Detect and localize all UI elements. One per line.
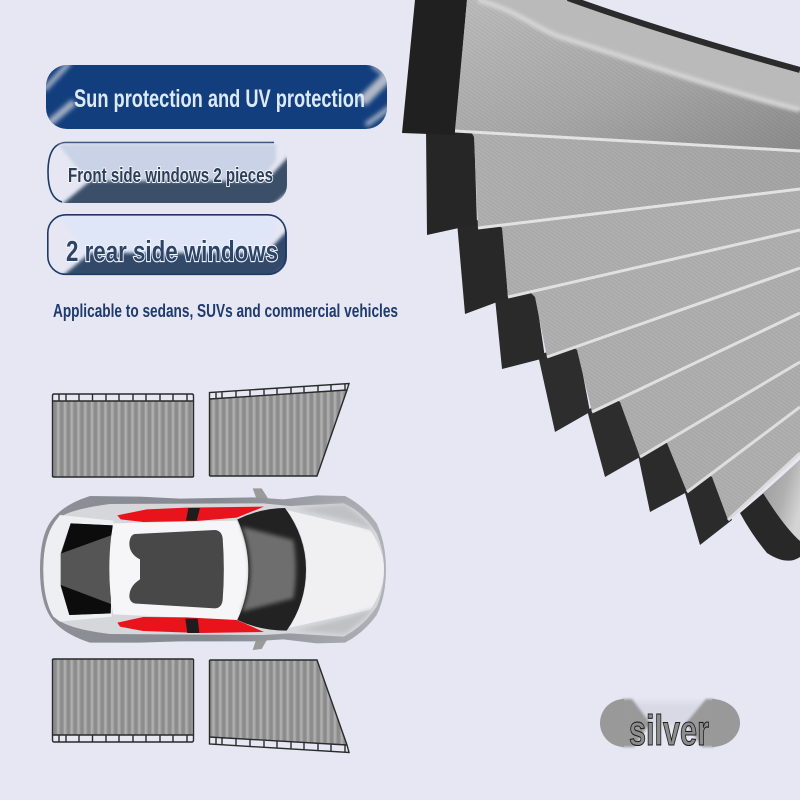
red rear side window top [117, 507, 264, 522]
badge label: Sun protection and UV protection [74, 85, 365, 113]
badge label: 2 rear side windows [66, 236, 278, 268]
badge: front side windows [48, 142, 290, 206]
pleat 8 [683, 395, 800, 545]
tag label: silver [629, 707, 709, 755]
badge: sun protection [44, 62, 392, 129]
roof [109, 521, 248, 620]
badge two-tone fill [62, 228, 287, 275]
shade diagram: front top [52, 394, 194, 477]
pleat 3 [457, 180, 800, 314]
shade diagram: rear bottom [210, 660, 349, 752]
colour tag: silver [600, 699, 740, 755]
panoramic sunroof [129, 530, 224, 608]
rear window lower shade [61, 585, 111, 615]
mirrors [253, 488, 272, 650]
windshield interior [242, 527, 296, 612]
tag right lobe [712, 699, 740, 747]
red front side window bottom [117, 617, 264, 633]
hood [287, 510, 384, 628]
clip band and edges [210, 384, 349, 476]
tag right lobe fade [686, 699, 714, 747]
rear window upper shade [61, 523, 113, 553]
rear deck [43, 515, 113, 622]
badge body [46, 65, 387, 129]
windshield [237, 508, 306, 631]
pleats [52, 401, 194, 477]
pleats [210, 390, 347, 476]
pleat 6 [587, 300, 800, 477]
pleats [52, 659, 194, 735]
tag centre shade [625, 702, 710, 726]
body upper surface [43, 503, 384, 637]
applicability note: Applicable to sedans, SUVs and commercial vehicles [53, 300, 398, 321]
pleat 1 with black binding and curved top edge [402, 0, 800, 151]
hood shadow bottom [297, 608, 373, 634]
badge label: Front side windows 2 pieces [68, 165, 273, 187]
badge outline [48, 215, 286, 274]
badge two-tone fill [58, 144, 290, 206]
pleat 2 [426, 128, 800, 235]
door pillars [185, 508, 200, 633]
pleat 4 [495, 220, 800, 369]
pleat 9 [740, 460, 800, 561]
pleat 5 [538, 255, 800, 432]
product photo: fanned pleated silver shade [402, 0, 800, 561]
hood shadow top [297, 504, 373, 530]
tag left lobe [600, 699, 624, 747]
outer body shell [40, 495, 386, 643]
rear window [61, 523, 113, 615]
clip band and edges [210, 660, 349, 752]
clip band [52, 659, 194, 742]
clip band [52, 394, 194, 477]
shade diagram: front bottom [52, 659, 194, 742]
badge outline [48, 142, 274, 202]
tag left lobe fade [622, 699, 650, 747]
shade diagram: rear top [210, 384, 349, 476]
pleats [210, 660, 347, 745]
pleat 7 [637, 350, 800, 512]
car top view [40, 488, 386, 650]
corner glints [44, 62, 392, 126]
badge: rear side windows [48, 215, 290, 278]
